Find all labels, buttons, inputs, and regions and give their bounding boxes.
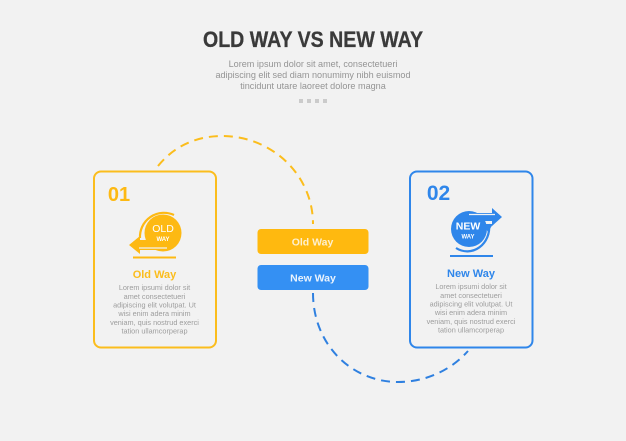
heading: old way: Old Way [133,269,177,281]
dashed connector: new way [313,293,468,382]
body text: new way: veniam, quis nostrud exerci [427,317,516,326]
heading: new way: New Way [447,268,496,280]
pagination dots [299,99,327,103]
panel: new way [410,172,532,348]
icon: old way [129,213,182,258]
subtitle text: Lorem ipsum dolor sit amet, consectetueri [229,59,397,69]
icon: new way: WAY [461,234,475,240]
button: new way [258,265,368,290]
button: old way [258,229,368,254]
body text: old way: Lorem ipsumi dolor sit [119,283,190,292]
body text: new way: adipiscing elit volutpat. Ut [430,300,512,308]
body text: old way: tation ullamcorperap [121,326,188,336]
body text: new way: wisi enim adera minim [434,308,507,317]
number 01: 01 [108,184,130,206]
body text: new way: amet consectetueri [440,291,502,300]
icon: new way [450,208,502,257]
icon: new way: NEW [456,220,480,232]
panel: old way [94,172,216,348]
body text: old way: adipiscing elit volutpat. Ut [113,300,196,310]
body text: old way [110,283,199,336]
button: new way: New Way [290,272,336,284]
subtitle text [215,59,411,91]
subtitle text: adipiscing elit sed diam nonumimy nibh euismod [215,70,411,80]
dashed connector: old way [158,136,313,224]
subtitle text: tincidunt utare laoreet dolore magna [240,81,387,91]
body text: old way: wisi enim adera minim [117,309,191,318]
icon: old way: OLD [152,223,174,235]
body text: new way: Lorem ipsumi dolor sit [435,282,507,291]
body text: old way: amet consectetueri [124,292,186,301]
number 02: 02 [427,182,450,205]
title: OLD WAY VS NEW WAY [203,27,423,52]
body text: new way: tation ullamcorperap [438,326,504,334]
body text: new way [427,282,516,334]
icon: old way: WAY [156,237,170,243]
button: old way: Old Way [292,236,333,248]
body text: old way: veniam, quis nostrud exerci [110,318,199,327]
